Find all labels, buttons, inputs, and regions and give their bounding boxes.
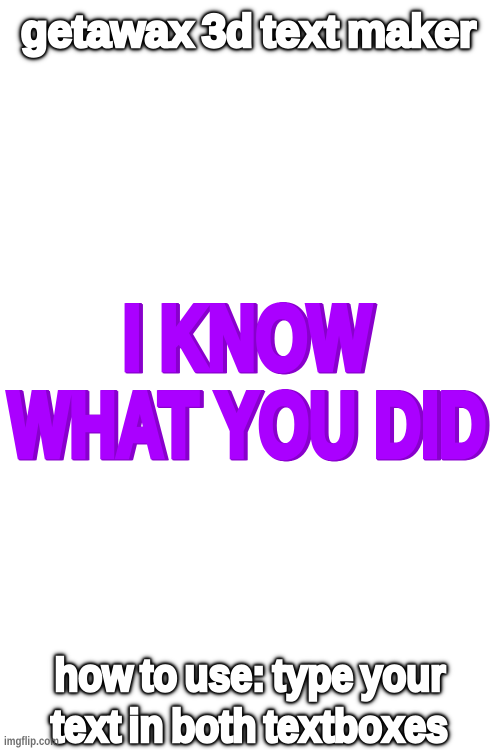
3d purple text [8, 288, 486, 476]
watermark: imgflip.com [4, 736, 59, 748]
title: getawax 3d text maker [21, 6, 476, 56]
instructions [51, 650, 448, 750]
instructions: how to use: type your [54, 650, 446, 700]
3d purple text: I KNOW [122, 288, 371, 389]
